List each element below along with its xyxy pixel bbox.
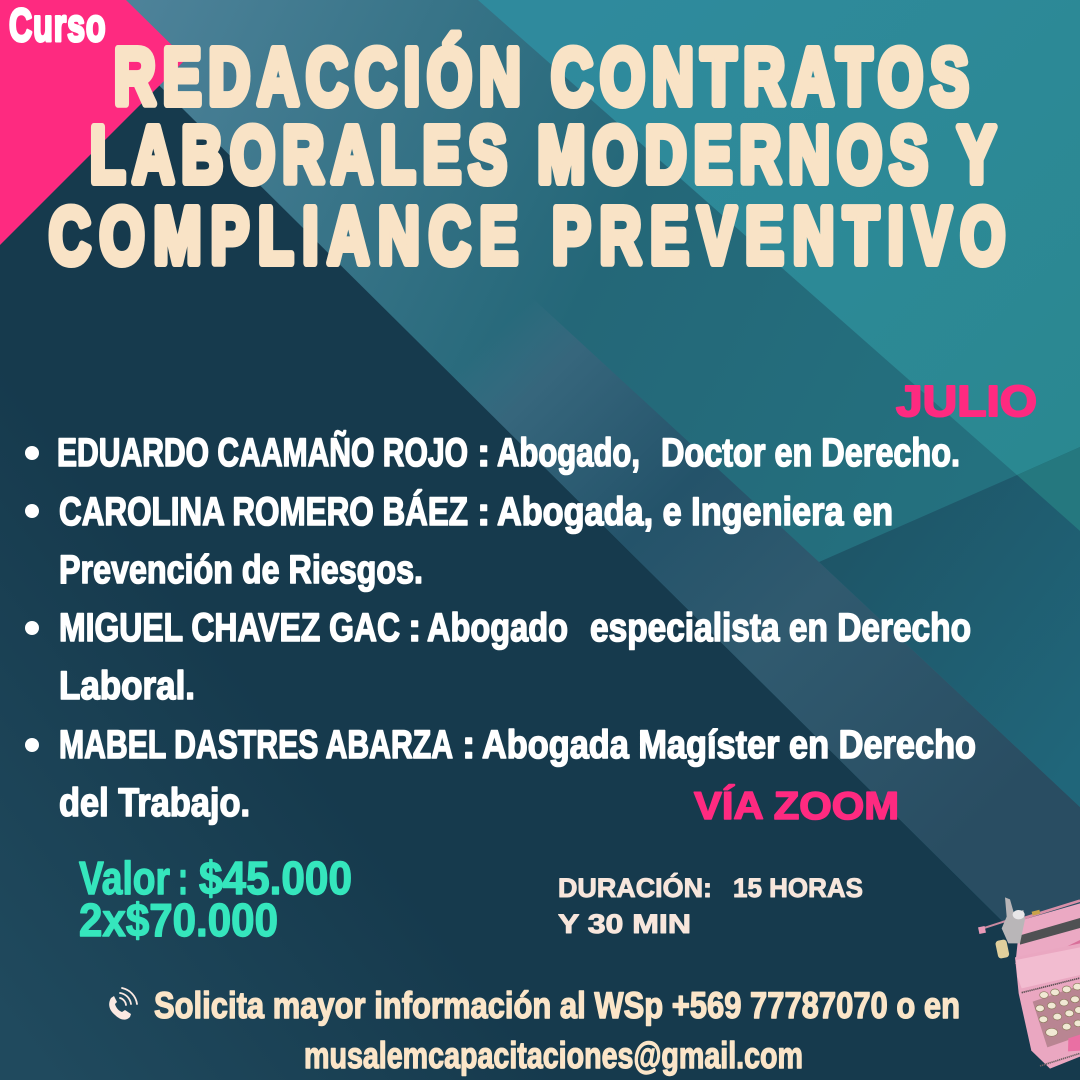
duration block: DURACIÓN: xyxy=(558,872,712,903)
speaker: Miguel Chavez Gac: especialista en Derecho xyxy=(590,606,971,650)
speaker: Carolina Romero Báez: Abogada, e Ingeniera en xyxy=(497,490,893,534)
speaker: Mabel Dastres Abarza: del Trabajo. xyxy=(59,781,250,825)
speaker: Mabel Dastres Abarza: Abogada Magíster en Derecho xyxy=(482,723,976,767)
pink corner ribbon xyxy=(0,0,186,245)
title xyxy=(49,32,1005,280)
title: COMPLIANCE PREVENTIVO xyxy=(49,191,1005,280)
speaker: Mabel Dastres Abarza: MABEL DASTRES ABARZA xyxy=(59,723,453,767)
speaker: Carolina Romero Báez: CAROLINA ROMERO BÁEZ xyxy=(59,489,468,534)
speaker: Miguel Chavez Gac: Laboral. xyxy=(59,664,195,708)
speaker: Mabel Dastres Abarza xyxy=(25,723,976,825)
contact text: musalemcapacitaciones@gmail.com xyxy=(304,1035,803,1076)
image: pink typewriter xyxy=(978,897,1080,1069)
speaker: Carolina Romero Báez xyxy=(25,489,893,592)
speaker: Eduardo Caamaño Rojo: Doctor en Derecho. xyxy=(661,431,960,475)
price block: Valor xyxy=(79,852,170,904)
label: Vía Zoom: VÍA ZOOM xyxy=(694,784,899,828)
speaker: Eduardo Caamaño Rojo: : xyxy=(477,431,490,475)
label: JULIO: JULIO xyxy=(896,377,1037,426)
speaker: Miguel Chavez Gac: Abogado xyxy=(427,606,568,650)
speaker: Carolina Romero Báez: Prevención de Riesgos. xyxy=(59,548,423,592)
title: LABORALES MODERNOS Y xyxy=(90,110,996,199)
contact text xyxy=(154,985,960,1076)
label: Curso: Curso xyxy=(9,0,106,51)
speaker: Miguel Chavez Gac xyxy=(25,606,971,708)
price block: $45.000 xyxy=(199,852,352,904)
speakers list xyxy=(25,429,976,825)
price block: : xyxy=(178,852,188,904)
price block: 2x$70.000 xyxy=(79,894,278,946)
speaker: Eduardo Caamaño Rojo: EDUARDO CAAMAÑO ROJO xyxy=(57,429,468,475)
speaker: Mabel Dastres Abarza: : xyxy=(462,723,475,767)
duration block: Y 30 MIN xyxy=(558,909,691,939)
title: REDACCIÓN CONTRATOS xyxy=(114,32,969,121)
speaker: Eduardo Caamaño Rojo xyxy=(25,429,960,475)
speaker: Eduardo Caamaño Rojo: Abogado, xyxy=(497,431,640,475)
speaker: Miguel Chavez Gac: : xyxy=(408,606,421,650)
price block xyxy=(79,852,352,946)
icon: phone with signal waves xyxy=(109,988,137,1020)
duration block: 15 HORAS xyxy=(733,873,863,903)
speaker: Carolina Romero Báez: : xyxy=(477,490,490,534)
speaker: Miguel Chavez Gac: MIGUEL CHAVEZ GAC xyxy=(59,606,400,650)
duration block xyxy=(558,872,863,939)
